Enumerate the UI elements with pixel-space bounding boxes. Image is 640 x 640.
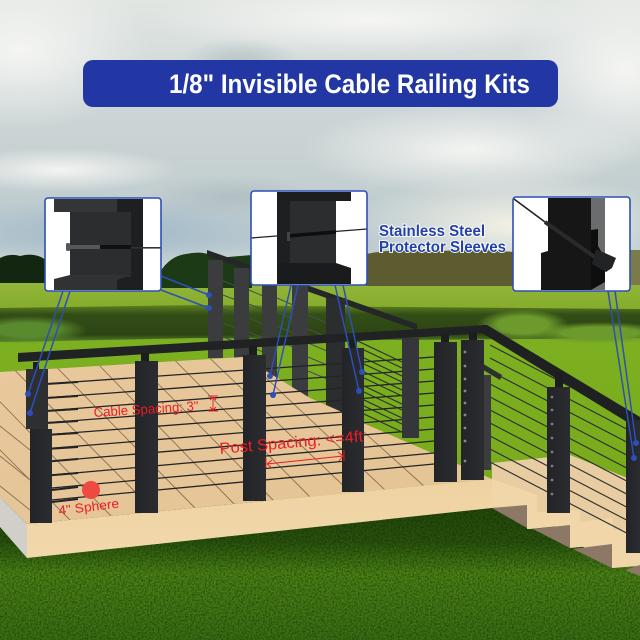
post 7 [402,338,419,438]
back cables [223,281,327,379]
stair cables [345,335,640,540]
annotation: 4 inch sphere [58,481,120,518]
reed band [0,305,640,342]
tree line [0,250,640,288]
back handrail [207,250,417,330]
deck fascia [0,479,492,558]
front handrail [18,325,640,430]
post 1 [26,362,52,523]
title banner: 1/8" Invisible Cable Railing Kits [169,69,530,99]
stair post [547,372,570,513]
inset 3: protector sleeve angle view [513,197,630,291]
annotation: 4 inch sphere: 4" Sphere [58,496,120,518]
post 6 [461,332,484,480]
annotation: post spacing: Post Spacing: <=4ft [219,428,364,458]
post 4 [342,340,364,492]
label: stainless steel protector sleeves: Protector Sleeves [379,239,506,256]
back posts [208,260,308,398]
callout dots [25,292,639,461]
post 3 [243,346,266,501]
title banner [83,60,558,107]
deck top [0,357,492,524]
far right post [626,420,640,553]
callout leader lines [28,276,636,458]
post 2 [135,353,158,513]
post 5 [434,334,457,482]
front cables [30,357,434,502]
tall mid post [326,298,345,413]
label: stainless steel protector sleeves [379,223,506,256]
stairs [492,455,640,576]
post behind with bolts [483,375,491,470]
lawn foreground [0,500,640,640]
inset 2: protector sleeve centre view [251,191,367,285]
annotation: cable spacing: Cable Spacing: 3" [93,398,199,420]
label: stainless steel protector sleeves: Stainless Steel [379,223,485,240]
deck board lines [0,359,424,520]
back railing [207,250,417,413]
sky background [0,0,640,285]
distant field and reeds [0,282,640,522]
front posts [26,332,640,553]
inset 1: protector sleeve end view [45,198,161,291]
